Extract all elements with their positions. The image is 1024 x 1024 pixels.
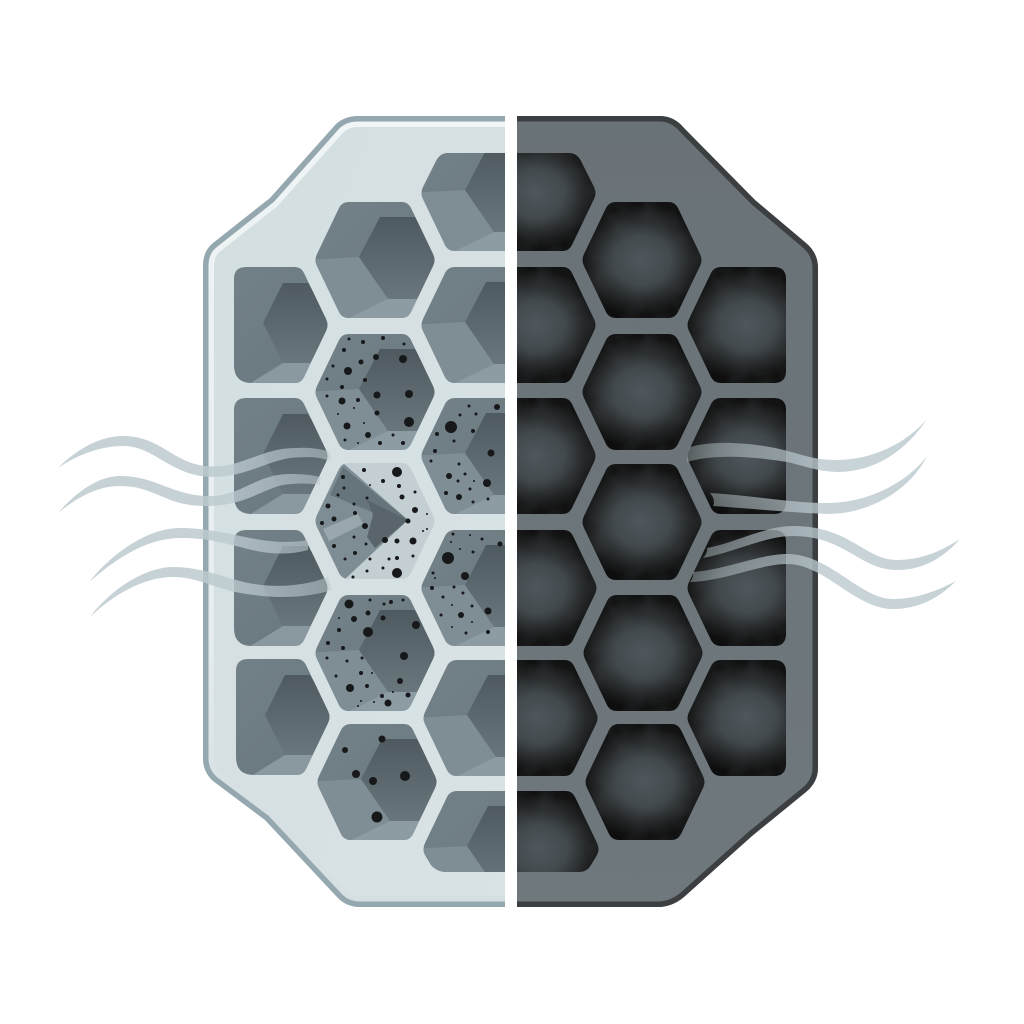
saturated cell: inner column row 2 bbox=[517, 267, 596, 383]
saturated cell: inner column top bbox=[517, 153, 596, 251]
saturated cell: centre column bottom bbox=[586, 724, 704, 840]
saturated cell: centre column row 3 bbox=[582, 464, 702, 580]
saturated cell: centre column row 4 bbox=[584, 595, 702, 711]
air stream 5 bbox=[687, 419, 927, 472]
clean cell: centre column bottom with few specks bbox=[318, 724, 436, 840]
air stream 2 bbox=[58, 474, 320, 513]
clean cell: left column row 1 bbox=[234, 267, 328, 383]
air stream 8 bbox=[690, 554, 956, 609]
clean cell: left column row 2 bbox=[234, 398, 328, 514]
clean cell: inner column bottom bbox=[424, 791, 505, 872]
air stream 3 bbox=[89, 528, 308, 582]
air stream 6 bbox=[710, 456, 927, 514]
saturated cell: inner column bottom bbox=[517, 791, 598, 872]
panel: clean filter half bbox=[203, 116, 505, 907]
clean cell: inner column row 2 bbox=[422, 267, 505, 383]
saturated cell: centre column row 2 bbox=[582, 334, 702, 450]
dusty cell: centre column row 2 bbox=[316, 334, 434, 450]
panel: saturated filter half bbox=[517, 116, 818, 907]
airflow leaving to the right bbox=[687, 419, 960, 609]
saturated cell: inner column row 5 bbox=[517, 660, 598, 776]
air stream 4 bbox=[90, 567, 332, 617]
clean cell: inner column top bbox=[422, 153, 505, 251]
saturated cell: inner column row 4 bbox=[517, 530, 596, 646]
clean cell: left column row 3 bbox=[234, 530, 328, 646]
filter frame: light side bbox=[203, 116, 505, 907]
saturated cell: inner column row 3 bbox=[517, 398, 596, 514]
air stream 7 bbox=[703, 526, 960, 570]
clean cell: left column row 4 bbox=[236, 659, 330, 775]
saturated cell: centre column top bbox=[582, 202, 702, 318]
dusty cell: inner column row 3 bbox=[422, 398, 505, 514]
dusty cell: centre column row 4 bbox=[316, 595, 434, 711]
air stream 1 bbox=[58, 436, 331, 477]
filter frame: dark side bbox=[517, 116, 818, 907]
dusty cell: inner column row 4 bbox=[422, 530, 505, 646]
clean cell: centre column top bbox=[316, 202, 434, 318]
clean cell: inner column row 5 bbox=[424, 660, 505, 776]
saturated cell: outer column row 1 bbox=[688, 267, 786, 383]
saturated cell: outer column row 2 bbox=[688, 398, 786, 514]
saturated cell: outer column row 4 bbox=[688, 660, 786, 776]
saturated cell: outer column row 3 bbox=[688, 530, 786, 646]
airflow entering from the left bbox=[58, 436, 332, 617]
dusty cell: centre column row 3 with inflow wedge bbox=[316, 463, 434, 579]
trapped dust particles bbox=[320, 336, 502, 822]
